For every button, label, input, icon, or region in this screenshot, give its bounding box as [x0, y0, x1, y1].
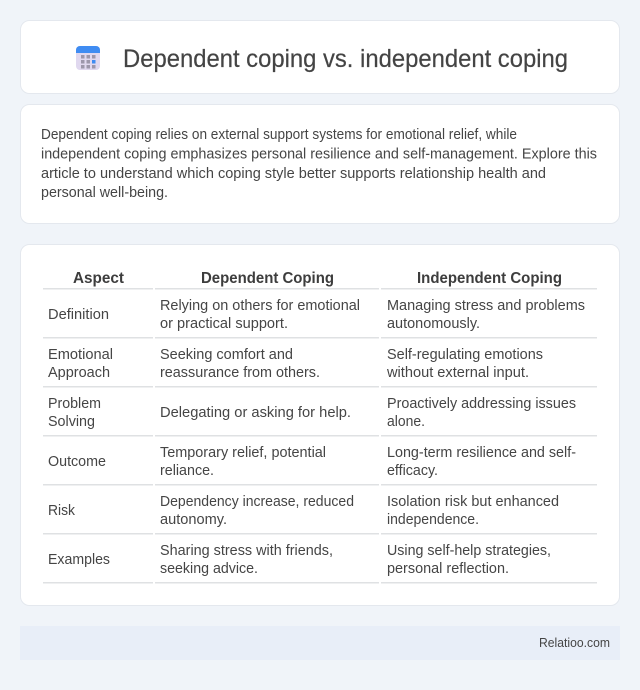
- panel: intro: [20, 104, 620, 224]
- row: emotional approach: Approach: [48, 365, 110, 381]
- row: risk: autonomy.: [160, 512, 227, 528]
- row: problem solving: [48, 396, 576, 430]
- footer text: Relatioo.com: [539, 636, 610, 650]
- row: risk: Isolation risk but enhanced: [387, 494, 559, 510]
- row: examples: personal reflection.: [387, 561, 509, 577]
- row: risk: independence.: [387, 512, 479, 528]
- row: outcome: [48, 445, 576, 479]
- icon: calendar: [76, 46, 100, 70]
- panel: comparison table: [20, 244, 620, 606]
- footer: [20, 626, 620, 660]
- panel: title card: [20, 20, 620, 94]
- row: risk: Risk: [48, 503, 76, 519]
- text block: intro paragraph: personal well-being.: [41, 185, 168, 201]
- row: examples: [48, 543, 551, 577]
- text block: intro paragraph: Dependent coping relies on external support systems for emotional relief, while: [41, 127, 517, 143]
- table header: Dependent Coping: [201, 270, 334, 287]
- row: definition: Managing stress and problems: [387, 298, 585, 314]
- row: outcome: Outcome: [48, 454, 106, 470]
- table header: [73, 270, 562, 287]
- row: examples: Sharing stress with friends,: [160, 543, 333, 559]
- table header: Aspect: [73, 270, 125, 287]
- table header: Independent Coping: [417, 270, 562, 287]
- row: problem solving: Proactively addressing issues: [387, 396, 576, 412]
- row: problem solving: Delegating or asking for help.: [160, 405, 351, 421]
- row: risk: [48, 494, 559, 528]
- row: examples: seeking advice.: [160, 561, 258, 577]
- row: problem solving: Solving: [48, 414, 95, 430]
- row: emotional approach: [48, 347, 543, 381]
- row: problem solving: Problem: [48, 396, 101, 412]
- row: examples: Examples: [48, 552, 110, 568]
- row: risk: Dependency increase, reduced: [160, 494, 354, 510]
- row: outcome: reliance.: [160, 463, 214, 479]
- row: definition: Definition: [48, 307, 109, 323]
- row: examples: Using self-help strategies,: [387, 543, 551, 559]
- row: emotional approach: Seeking comfort and: [160, 347, 293, 363]
- row: emotional approach: reassurance from others.: [160, 365, 320, 381]
- row: definition: autonomously.: [387, 316, 480, 332]
- row: emotional approach: without external input.: [386, 365, 529, 381]
- row: definition: [48, 298, 585, 332]
- row: definition: Relying on others for emotional: [160, 298, 360, 314]
- text block: intro paragraph: [41, 127, 597, 201]
- row: outcome: Long-term resilience and self-: [387, 445, 576, 461]
- text block: intro paragraph: article to understand which coping style better supports relationship health and: [41, 166, 546, 182]
- row: emotional approach: Self-regulating emotions: [387, 347, 543, 363]
- title: Dependent coping vs. independent coping: [123, 45, 568, 73]
- row: definition: or practical support.: [160, 316, 288, 332]
- row: outcome: Temporary relief, potential: [160, 445, 326, 461]
- row: problem solving: alone.: [387, 414, 425, 430]
- row: outcome: efficacy.: [387, 463, 438, 479]
- row: emotional approach: Emotional: [48, 347, 113, 363]
- text block: intro paragraph: independent coping emphasizes personal resilience and self-management. Explore this: [41, 146, 597, 162]
